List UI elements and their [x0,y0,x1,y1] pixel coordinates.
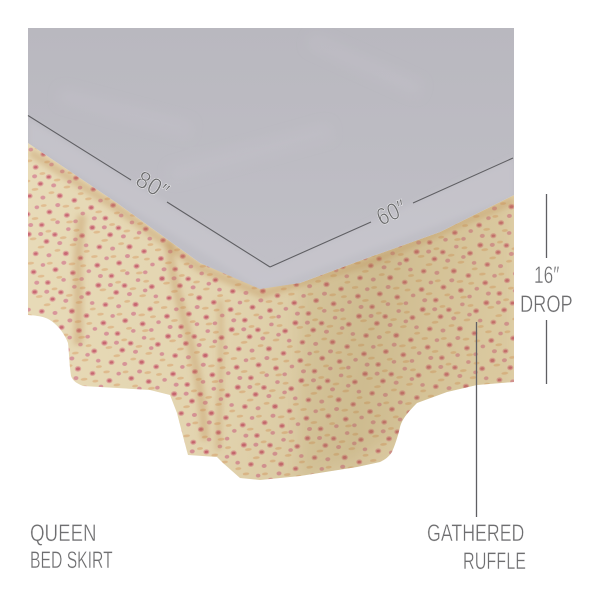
callout: gathered ruffle: RUFFLE [463,548,526,575]
dimension: 80 inch width [28,116,270,267]
dimension: 60 inch length: 60″ [372,194,411,231]
callout: gathered ruffle: GATHERED [427,520,524,547]
product name label: QUEEN [30,520,97,547]
dimension: 16 inch drop [520,194,573,384]
grey mattress sheet [28,28,514,293]
dimension: 16 inch drop: DROP [520,291,573,318]
dimension: 60 inch length [270,158,513,267]
callout: gathered ruffle [427,322,526,575]
dimension: 80 inch width: 80″ [131,166,174,206]
dimension: 16 inch drop: 16″ [534,262,560,289]
product name label: BED SKIRT [30,547,113,574]
product name label [30,520,113,574]
bed skirt fabric [20,130,520,490]
